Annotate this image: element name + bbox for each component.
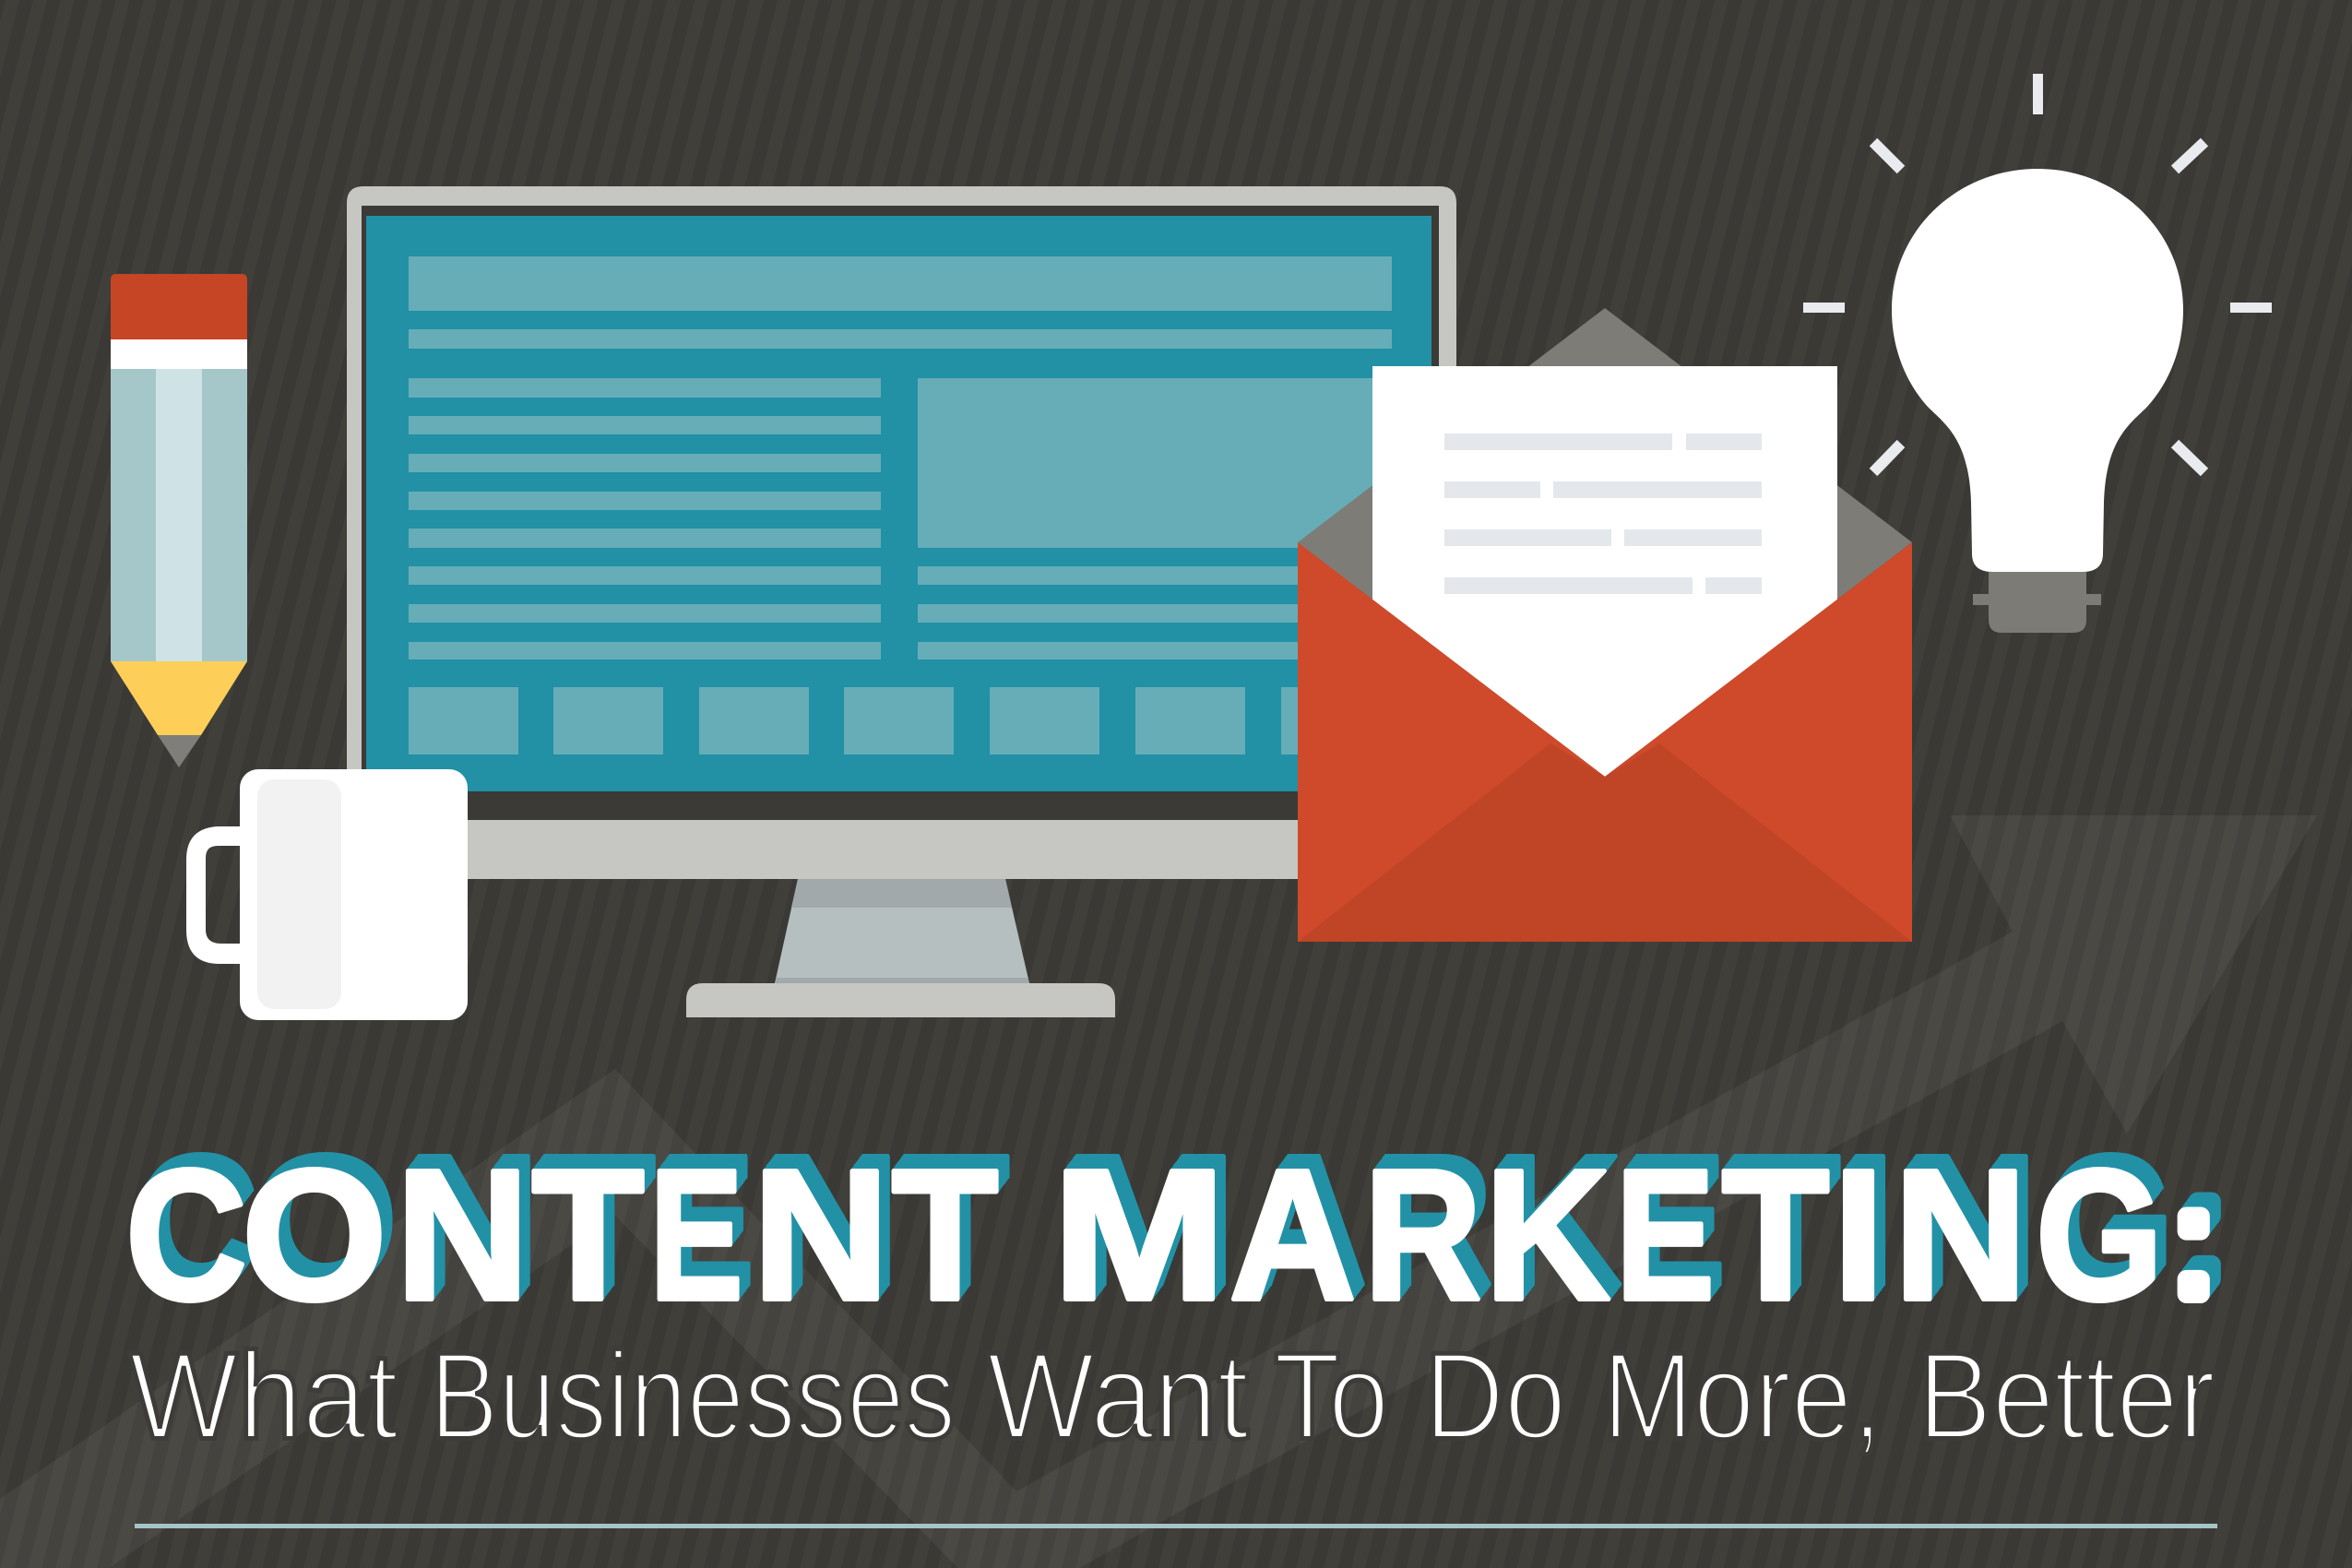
subtitle: Do	[1424, 1328, 1566, 1465]
title: K	[1485, 1131, 1610, 1339]
title: N	[1894, 1131, 2027, 1339]
title: E	[649, 1131, 743, 1339]
subtitle: More,	[1602, 1328, 1883, 1465]
title: N	[396, 1131, 529, 1339]
background arrow	[0, 815, 2317, 1568]
subtitle: To	[1274, 1328, 1389, 1465]
title: T	[531, 1131, 644, 1339]
subtitle: Businesses	[430, 1328, 956, 1465]
title: A	[1229, 1131, 1356, 1339]
title: M	[1052, 1131, 1226, 1339]
title: I	[1833, 1131, 1884, 1339]
title: R	[1364, 1131, 1481, 1339]
title: T	[1722, 1131, 1829, 1339]
title: G	[2036, 1131, 2163, 1339]
icon: light bulb	[1803, 74, 2272, 633]
title: N	[753, 1131, 889, 1339]
icon: coffee mug	[186, 769, 468, 1020]
monitor screen	[366, 216, 1431, 791]
icon: pencil	[111, 274, 247, 767]
bulb base	[1973, 572, 2101, 633]
bulb rays	[1803, 74, 2272, 472]
icon: open envelope with letter	[1298, 308, 1912, 942]
title: C	[125, 1131, 247, 1339]
subtitle: Want	[987, 1328, 1249, 1465]
subtitle: What	[129, 1328, 398, 1465]
icon: desktop monitor	[347, 186, 1456, 1017]
monitor frame	[347, 186, 1456, 820]
subtitle	[129, 1328, 2215, 1465]
title: E	[1616, 1131, 1715, 1339]
monitor stand	[686, 879, 1115, 1017]
subtitle: Better	[1918, 1328, 2215, 1465]
letter	[1372, 366, 1837, 777]
bulb glass	[1892, 169, 2183, 572]
title: O	[242, 1131, 387, 1339]
title: T	[892, 1131, 998, 1339]
divider rule	[135, 1524, 2217, 1528]
title: :	[2173, 1160, 2214, 1325]
